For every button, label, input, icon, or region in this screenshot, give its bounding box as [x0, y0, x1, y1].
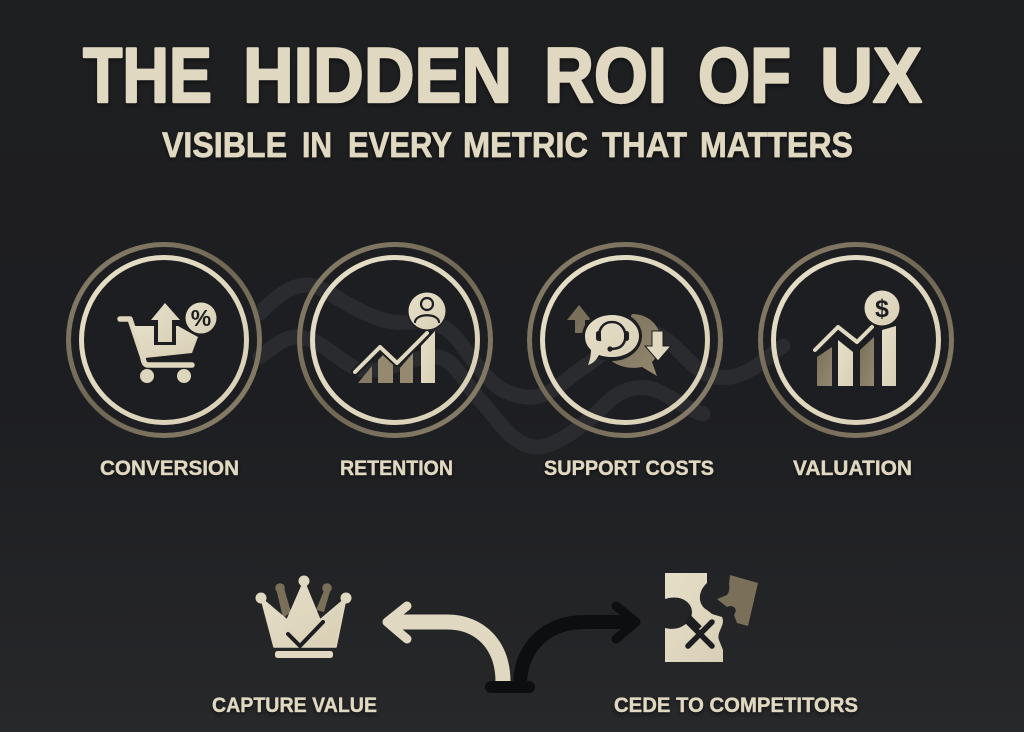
icon: shopping cart with up arrow and percent badge	[120, 300, 219, 383]
label: retention: RETENTION	[340, 457, 453, 480]
subtitle: METRIC	[463, 126, 588, 165]
label: cede to competitors: CEDE TO COMPETITORS	[614, 694, 858, 717]
panel: conversion	[68, 244, 260, 480]
icon: bar chart with dollar badge	[815, 289, 901, 386]
arrow: left to capture value	[387, 606, 503, 682]
subtitle: EVERY	[348, 126, 452, 165]
subtitle: VISIBLE	[162, 126, 287, 165]
title: UX	[820, 31, 922, 119]
panel: retention	[300, 244, 490, 480]
title: ROI	[544, 31, 667, 119]
arrow: right to competitors	[491, 606, 636, 687]
icon: growth chart with user badge	[355, 291, 447, 383]
icon: bar chart with dollar badge: $	[875, 295, 889, 323]
icon: support chat bubbles with arrows	[567, 305, 671, 376]
label: conversion: CONVERSION	[100, 457, 239, 480]
icon: shopping cart with up arrow and percent badge: %	[191, 305, 211, 331]
title: OF	[698, 31, 791, 119]
title: THE	[83, 31, 212, 119]
conversion rings	[68, 244, 260, 436]
subtitle: IN	[302, 126, 332, 165]
title: HIDDEN	[243, 31, 512, 119]
panel: valuation	[760, 244, 952, 480]
panel: support costs	[530, 244, 720, 480]
label: valuation: VALUATION	[793, 457, 912, 480]
subtitle	[162, 126, 853, 165]
icon: broken puzzle with X	[665, 573, 758, 662]
retention rings	[300, 244, 490, 436]
subtitle: MATTERS	[700, 126, 853, 165]
label: support costs: SUPPORT COSTS	[544, 457, 714, 480]
icon: crown with check	[256, 576, 352, 658]
subtitle: THAT	[602, 126, 687, 165]
valuation rings	[760, 244, 952, 436]
label: capture value: CAPTURE VALUE	[212, 694, 377, 717]
support rings	[530, 244, 720, 436]
title	[83, 31, 922, 119]
background flow waves	[260, 285, 783, 447]
